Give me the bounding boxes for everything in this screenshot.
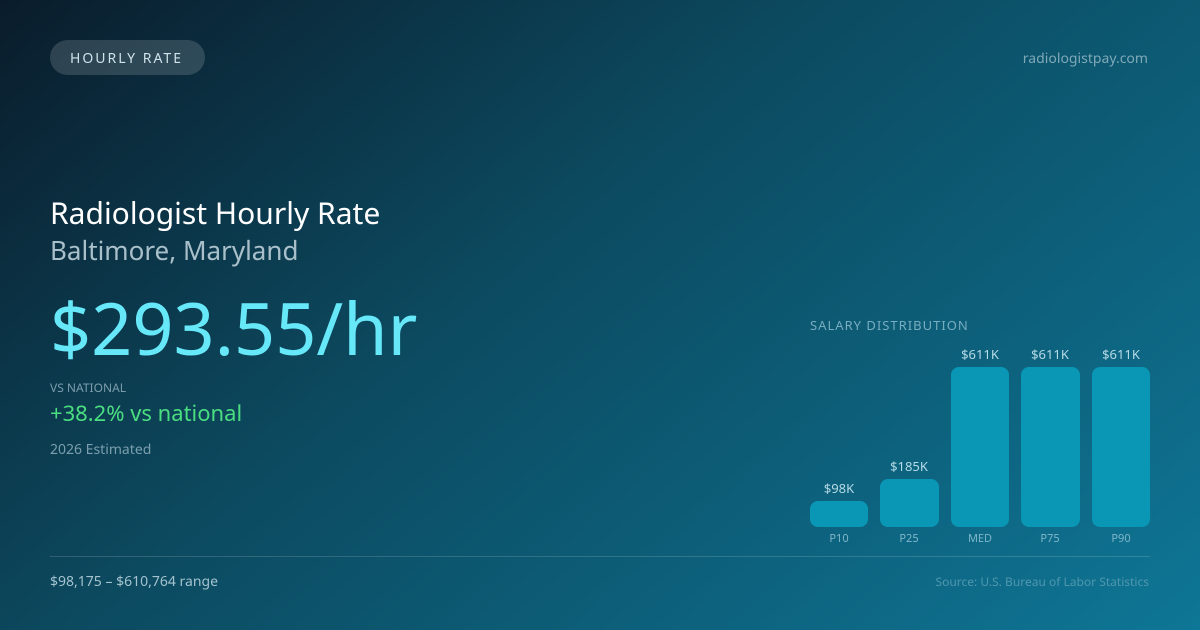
comparison value: +38.2% vs national: [50, 398, 242, 428]
title: Radiologist Hourly Rate: [50, 192, 380, 233]
location subtitle: Baltimore, Maryland: [50, 232, 298, 268]
value: P25: $185K: [890, 457, 928, 475]
bar chart: salary distribution: [810, 316, 1150, 546]
value: P75: $611K: [1031, 345, 1069, 363]
label: P25: P25: [899, 531, 919, 546]
badge label: HOURLY RATE: [70, 49, 183, 68]
source note: Source: U.S. Bureau of Labor Statistics: [936, 573, 1149, 590]
bar: P25: [880, 479, 939, 527]
value: median: $611K: [961, 345, 999, 363]
value: P10: $98K: [824, 479, 854, 497]
label: median: MED: [968, 531, 992, 546]
year note: 2026 Estimated: [50, 440, 151, 459]
label: P90: P90: [1111, 531, 1131, 546]
label: P10: P10: [829, 531, 849, 546]
comparison label: VS NATIONAL: [50, 379, 126, 396]
salary range: $98,175 – $610,764 range: [50, 572, 218, 591]
hourly rate value: $293.55/hr: [50, 279, 417, 377]
bar: P75: [1021, 367, 1080, 527]
badge: hourly rate: [50, 40, 205, 75]
bar: P10: [810, 501, 868, 527]
bar: median: [951, 367, 1009, 527]
label: P75: P75: [1040, 531, 1060, 546]
chart heading: SALARY DISTRIBUTION: [810, 316, 969, 334]
site domain: radiologistpay.com: [1023, 49, 1148, 68]
value: P90: $611K: [1102, 345, 1140, 363]
bar: P90: [1092, 367, 1150, 527]
